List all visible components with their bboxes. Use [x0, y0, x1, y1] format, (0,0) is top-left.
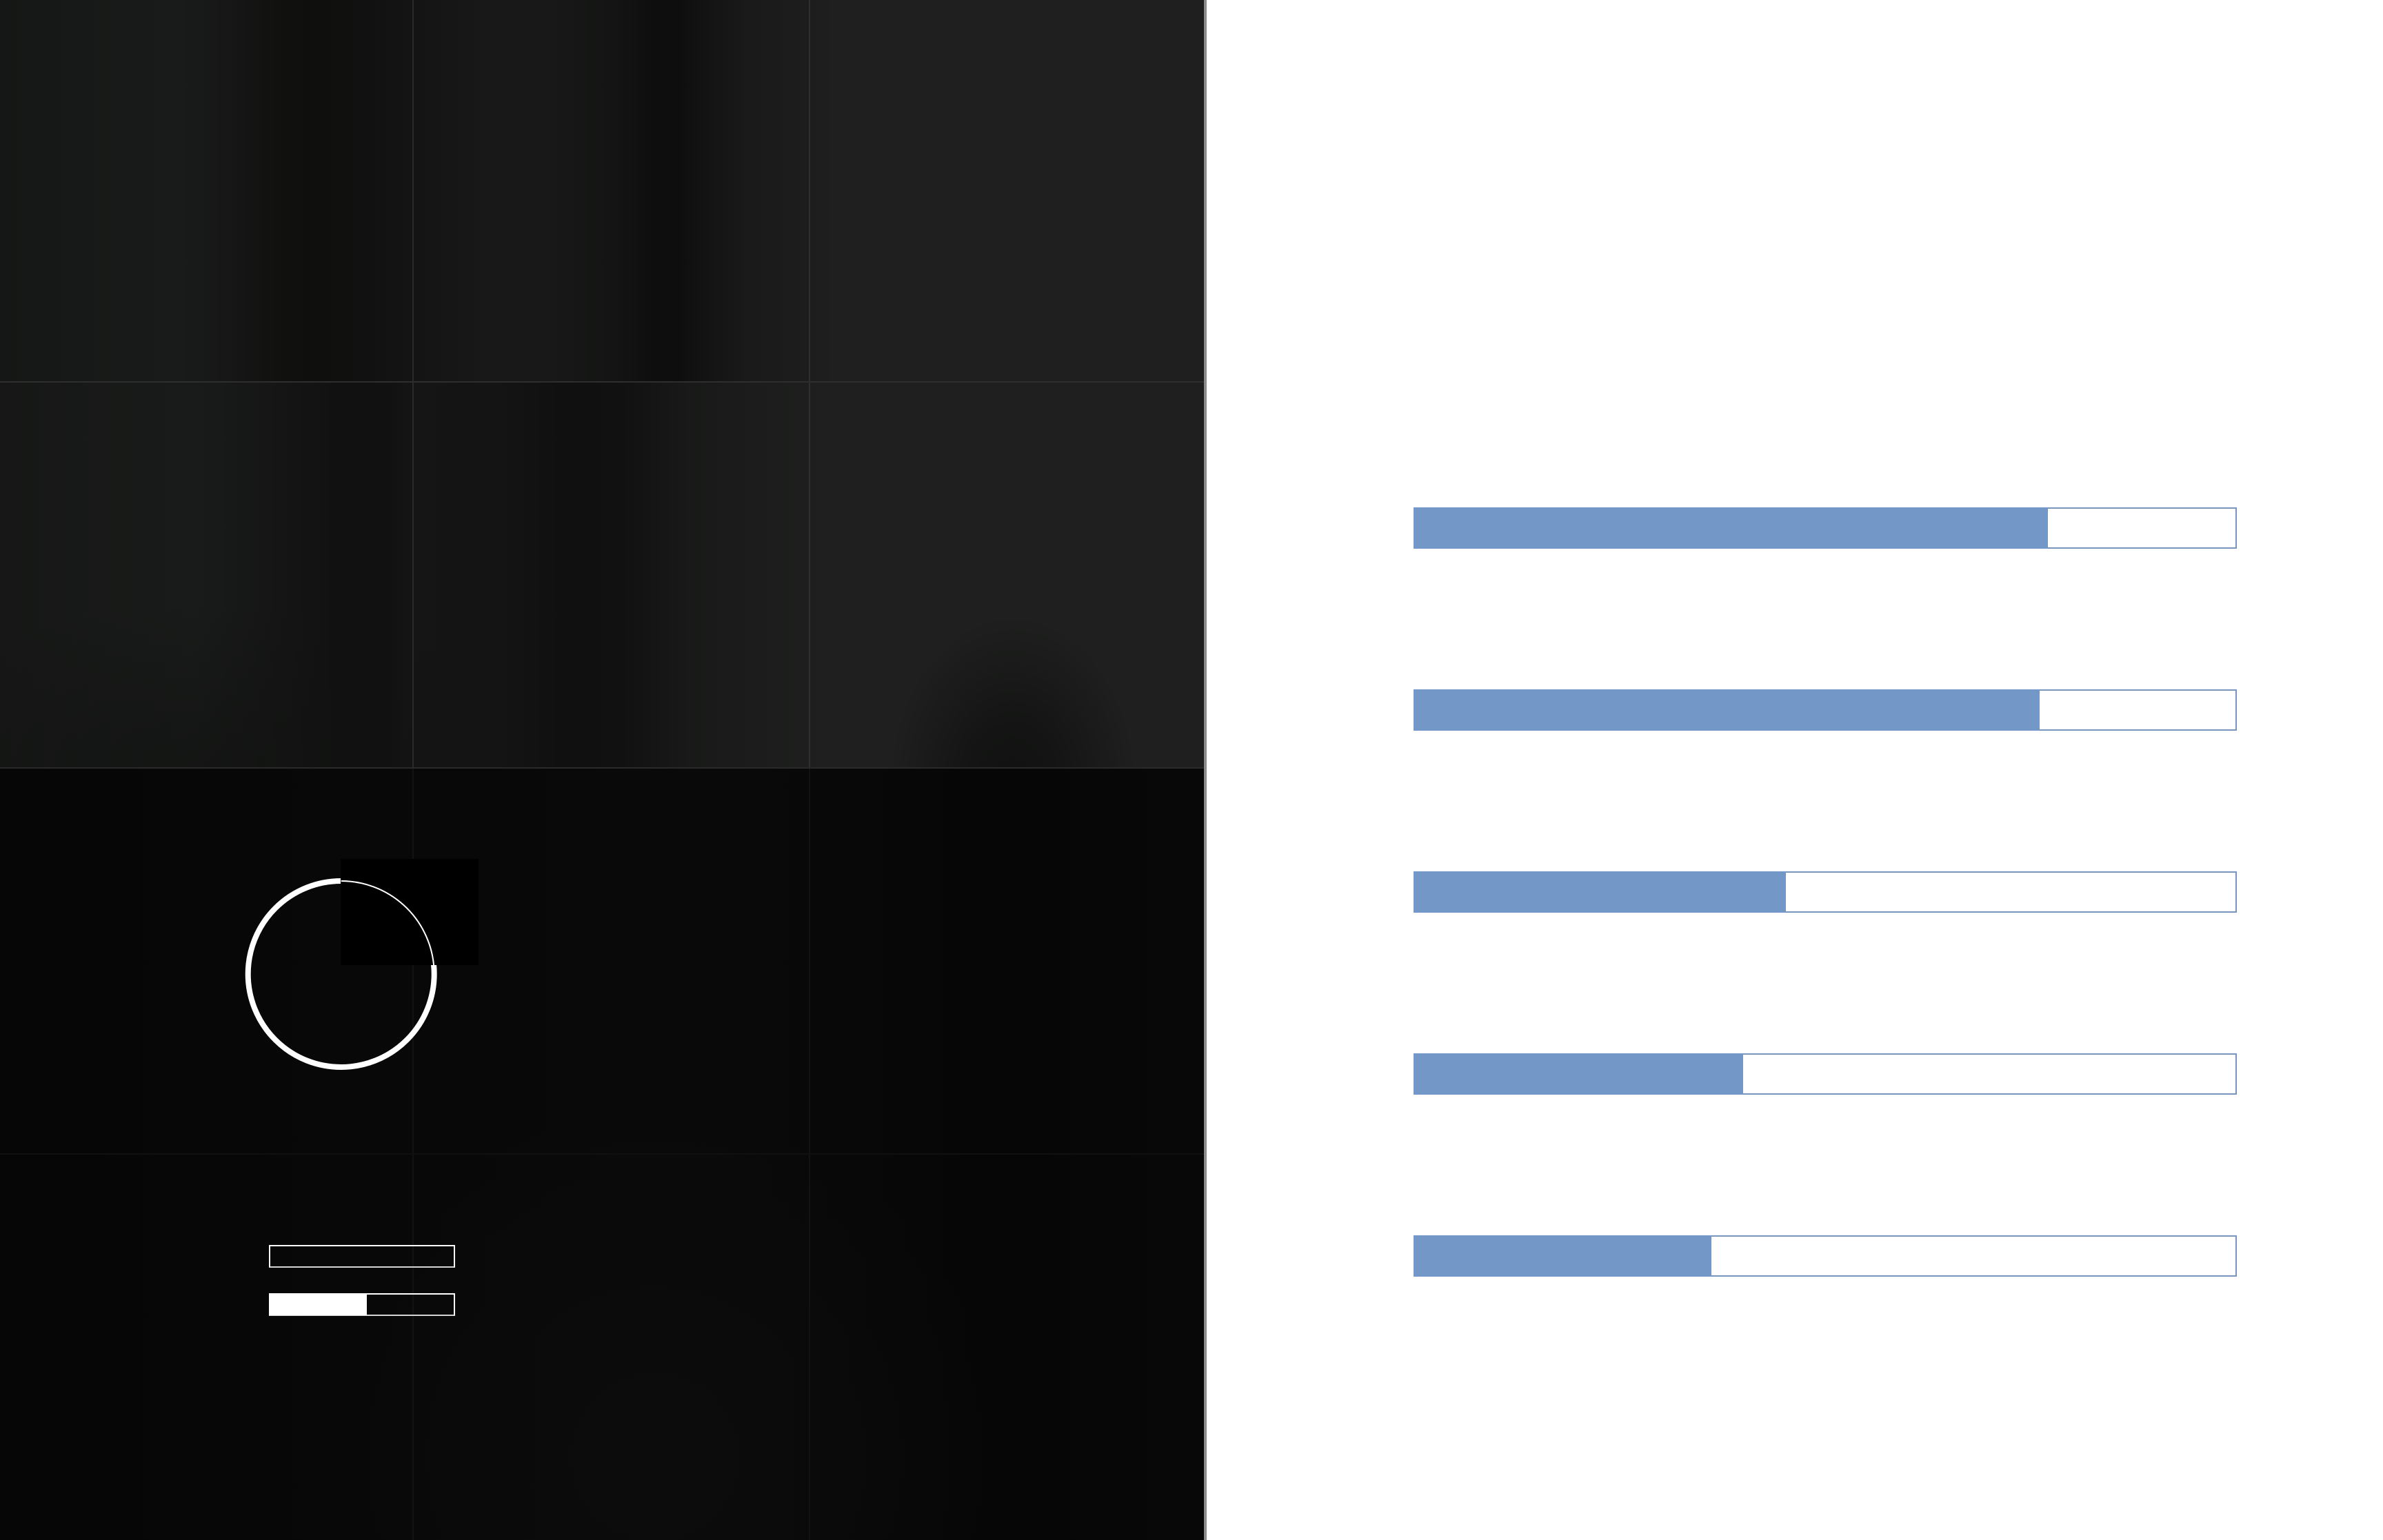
- circular progress ring: [245, 859, 479, 1070]
- divider edge: [1204, 0, 1207, 1540]
- blue progress bar 4: [1414, 1053, 2237, 1095]
- blue progress bar 2: [1414, 689, 2237, 731]
- panel: dark photo grid: [0, 0, 1207, 1540]
- small empty progress bar: [269, 1245, 455, 1268]
- blue progress bar 5: [1414, 1235, 2237, 1277]
- image tile rows 3 and 4: [0, 768, 1204, 1540]
- blue progress bar 1: [1414, 507, 2237, 549]
- blue progress bar 3: [1414, 871, 2237, 913]
- grid lines: [0, 0, 1204, 1540]
- image tile row 1: [0, 0, 1204, 382]
- small half-filled progress bar: [269, 1293, 455, 1316]
- image tile row 2: [0, 382, 1204, 768]
